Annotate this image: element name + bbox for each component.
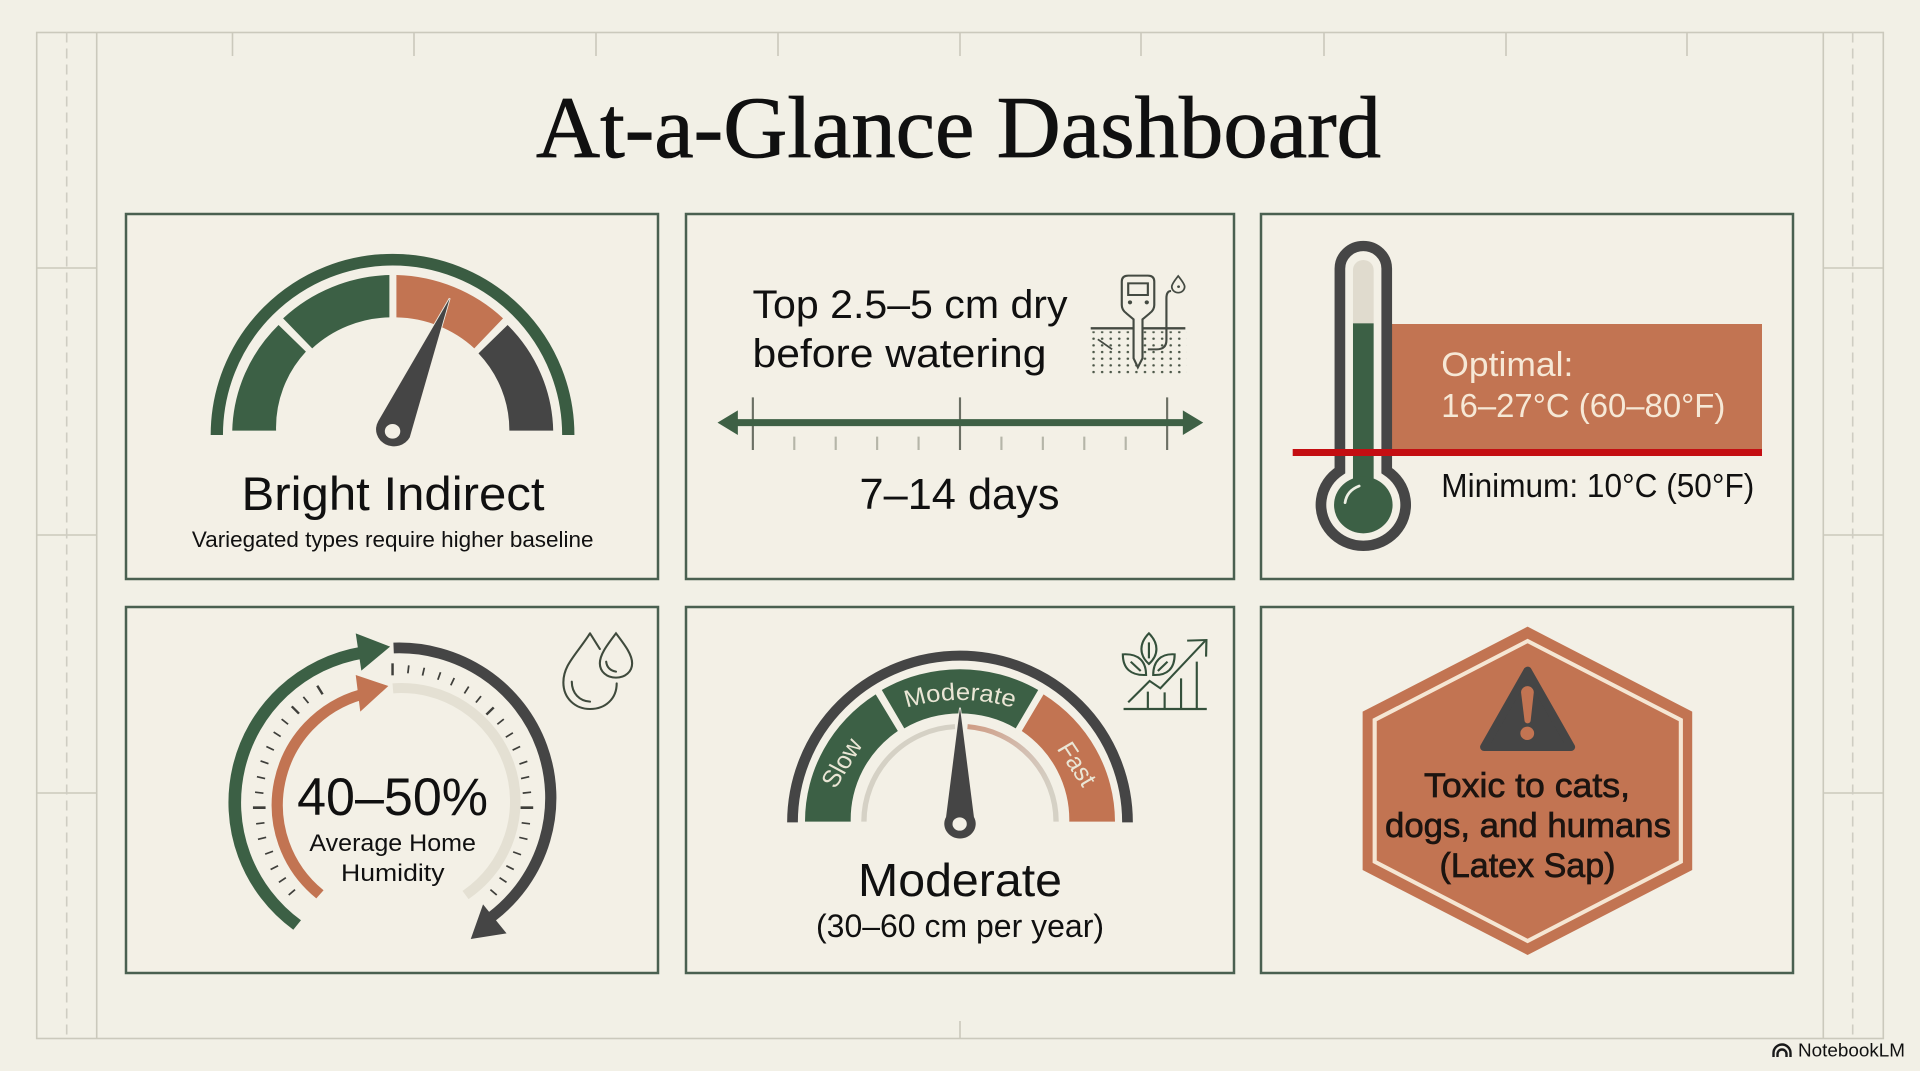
text: growth per year: (30–60 cm per year) <box>816 908 1104 944</box>
optimal range band: Optimal: <box>1441 346 1573 384</box>
text: 7-14 days: 7–14 days <box>860 470 1060 519</box>
optimal range band <box>1392 324 1762 455</box>
badge: toxic warning: Toxic to cats, <box>1424 767 1630 805</box>
text: soil check: Top 2.5–5 cm dry <box>752 283 1068 327</box>
panel: light <box>126 214 658 579</box>
logo: NotebookLM: NotebookLM <box>1798 1040 1905 1060</box>
heading: Moderate: Moderate <box>858 854 1062 906</box>
text: soil check: before watering <box>752 332 1046 376</box>
text: humidity value: 40–50% <box>297 768 488 827</box>
text: humidity label <box>309 830 476 887</box>
heading: Bright Indirect: Bright Indirect <box>242 467 544 520</box>
badge: toxic warning <box>1363 627 1692 955</box>
text: humidity label: Humidity <box>341 860 445 887</box>
panel: toxicity <box>1261 607 1793 973</box>
icon: thermometer <box>1321 246 1406 546</box>
chart: growth gauge: Fast <box>1051 737 1102 791</box>
chart: watering timeline <box>717 397 1203 450</box>
icon: plant growth chart <box>1123 633 1207 709</box>
icon: light gauge <box>217 260 568 446</box>
minimum temperature line <box>1293 449 1762 456</box>
panel: humidity <box>126 607 658 973</box>
chart: growth gauge: Moderate <box>904 682 1015 707</box>
icon: water drops <box>563 633 632 709</box>
text: soil check <box>752 283 1068 376</box>
panel: temperature <box>1261 214 1793 579</box>
title: At-a-Glance Dashboard <box>536 80 1381 177</box>
optimal range band: 16–27°C (60–80°F) <box>1441 387 1725 424</box>
panel: watering <box>686 214 1234 579</box>
text: humidity label: Average Home <box>309 830 476 857</box>
chart: growth gauge: Slow <box>816 733 869 792</box>
chart: growth gauge <box>787 650 1133 838</box>
panel: growth rate <box>684 606 1236 974</box>
icon: soil moisture meter <box>1091 276 1186 375</box>
chart: humidity dial <box>235 633 551 939</box>
badge: toxic warning: dogs, and humans <box>1385 807 1671 845</box>
text: minimum temperature: Minimum: 10°C (50°F) <box>1441 467 1754 504</box>
badge: toxic warning: (Latex Sap) <box>1440 847 1616 885</box>
text: variegated note: Variegated types require higher baseline <box>192 527 594 552</box>
